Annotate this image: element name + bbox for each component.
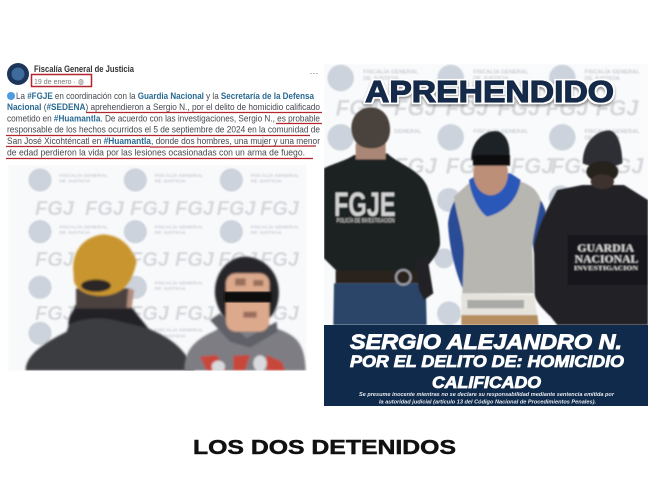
- jacket lettering subline: POLICÍA DE INVESTIGACIÓN: [337, 216, 395, 225]
- photo backdrop: GENERAL: [394, 129, 422, 135]
- photo backdrop: FGJ: [260, 249, 300, 271]
- heading: APREHENDIDO: APREHENDIDO: [365, 74, 614, 109]
- photo backdrop: FGJ: [35, 249, 75, 271]
- photo backdrop: [27, 167, 300, 346]
- photo backdrop: DE JUSTICIA: [251, 179, 282, 185]
- photo backdrop: FGJ: [217, 198, 256, 220]
- photo backdrop: FGJ: [175, 198, 215, 220]
- photo backdrop: FGJ: [130, 303, 170, 325]
- photo backdrop: FGJ: [551, 153, 594, 178]
- photo backdrop: [324, 64, 648, 325]
- photo backdrop: FISCALÍA GENERAL: [155, 171, 203, 179]
- photo backdrop: FISCALÍA GENERAL: [155, 278, 203, 286]
- post body text: San José Xicohténcatl en #Huamantla, donde dos hombres, una mujer y una menor: [7, 135, 320, 146]
- panel: photo of arrested suspect with agents: [324, 64, 648, 325]
- panel: photo of two detainees: [8, 165, 307, 373]
- photo backdrop: FGJ: [35, 303, 75, 325]
- photo backdrop: FGJ: [511, 153, 554, 178]
- censor bar, left photo: [224, 292, 272, 302]
- person: man in mustard cap, from behind: [26, 234, 195, 371]
- photo backdrop: DE JUSTICIA: [585, 135, 620, 141]
- censor bar, right photo: [473, 155, 510, 166]
- photo backdrop: DE JUSTICIA: [155, 230, 186, 236]
- photo backdrop: FGJ: [175, 303, 215, 325]
- photo backdrop: FGJ: [85, 198, 125, 220]
- post body text: Nacional (#SEDENA) aprehendieron a Sergio N., por el delito de homicidio calificado: [7, 101, 320, 112]
- person: detained suspect in grey and blue shirt: [448, 131, 546, 325]
- photo backdrop: FISCALÍA GENERAL: [585, 127, 640, 135]
- presumption of innocence notice: [359, 392, 615, 406]
- photo backdrop: FGJ: [394, 153, 438, 178]
- photo backdrop: FISCALÍA GENERAL: [59, 171, 108, 179]
- charge line one: POR EL DELITO DE: HOMICIDIO: [350, 353, 624, 371]
- vest lettering: GUARDIA: [577, 244, 635, 255]
- photo backdrop: FGJ: [130, 249, 170, 271]
- photo backdrop: DE JUSTICIA: [363, 76, 399, 82]
- presumption of innocence notice: Se presume inocente mientras no se declare su responsabilidad mediante sentencia emitida por: [359, 392, 615, 398]
- post body text: cometido en #Huamantla. De acuerdo con las investigaciones, Sergio N., es probable: [7, 112, 320, 124]
- photo backdrop: FGJ: [130, 198, 170, 220]
- person: man with censored face: [184, 257, 306, 373]
- photo backdrop: FISCALÍA GENERAL: [363, 68, 419, 76]
- post date with red box: 19 de enero · ◍: [34, 77, 84, 86]
- photo backdrop: FISCALÍA GENERAL: [155, 326, 203, 334]
- post date with red box: [32, 74, 92, 86]
- photo backdrop: FGJ: [394, 95, 438, 120]
- suspect name: SERGIO ALEJANDRO N.: [350, 330, 622, 354]
- options menu: ···: [310, 68, 318, 78]
- photo backdrop: FISCALÍA GENERAL: [473, 68, 529, 76]
- post body text: responsable de los hechos ocurridos el 5 de septiembre de 2024 en la comunidad de: [7, 124, 320, 134]
- vest lettering: NACIONAL: [575, 255, 639, 266]
- photo backdrop: FGJ: [175, 249, 215, 271]
- photo backdrop: FISCALÍA GENERAL: [59, 222, 108, 230]
- photo backdrop: FGJ: [35, 198, 75, 220]
- photo backdrop: DE JUSTICIA: [59, 179, 91, 185]
- icon: agency avatar: [7, 63, 29, 85]
- photo backdrop: FISCALÍA GENERAL: [251, 171, 299, 179]
- person: Guardia Nacional agent from behind: [534, 131, 648, 325]
- photo backdrop: DE JUSTICIA: [155, 333, 186, 339]
- caption: los dos detenidos: LOS DOS DETENIDOS: [193, 436, 456, 459]
- post body text: La #FGJE en coordinación con la Guardia Nacional y la Secretaría de la Defensa: [16, 90, 315, 101]
- photo backdrop: DE JUSTICIA: [59, 230, 91, 236]
- post body text: [7, 90, 320, 158]
- vest lettering: INVESTIGACION: [574, 265, 638, 272]
- panel: name banner: [324, 325, 648, 406]
- photo backdrop: DE JUSTICIA: [155, 179, 186, 185]
- post account name: Fiscalía General de Justicia: [34, 63, 135, 74]
- photo backdrop: FGJ: [218, 249, 258, 271]
- photo backdrop: FISCALÍA GENERAL: [585, 68, 640, 76]
- vest lettering: [574, 244, 639, 272]
- photo backdrop: FGJ: [601, 153, 644, 178]
- photo backdrop: FGJ: [446, 95, 489, 120]
- photo backdrop: FGJ: [546, 95, 589, 120]
- photo backdrop: FGJ: [497, 95, 541, 120]
- panel: social media post: [6, 63, 322, 158]
- photo backdrop: DE JUSTICIA: [251, 230, 282, 236]
- photo backdrop: FISCALÍA GENERAL: [251, 222, 299, 230]
- post body text: de edad perdieron la vida por las lesiones ocasionadas con un arma de fuego.: [7, 146, 305, 158]
- photo backdrop: DE JUSTICIA: [585, 76, 620, 82]
- person: FGJE agent from behind: [324, 107, 440, 325]
- photo backdrop: DE JUSTICIA: [473, 76, 509, 82]
- photo backdrop: FGJ: [260, 198, 300, 220]
- photo backdrop: FGJ: [596, 95, 639, 120]
- photo backdrop: FGJ: [336, 95, 379, 120]
- charge line two: CALIFICADO: [432, 374, 541, 392]
- photo backdrop: DE JUSTICIA: [155, 286, 186, 292]
- presumption of innocence notice: la autoridad judicial (artículo 13 del Código Nacional de Procedimientos Penales).: [379, 400, 596, 406]
- red underlines: [6, 112, 322, 158]
- photo backdrop: FGJ: [446, 153, 489, 178]
- photo backdrop: FISCALÍA GENERAL: [473, 127, 529, 135]
- photo backdrop: FISCALÍA GENERAL: [155, 222, 203, 230]
- photo backdrop: FGJ: [260, 303, 300, 325]
- jacket lettering FGJE: FGJE: [334, 186, 396, 224]
